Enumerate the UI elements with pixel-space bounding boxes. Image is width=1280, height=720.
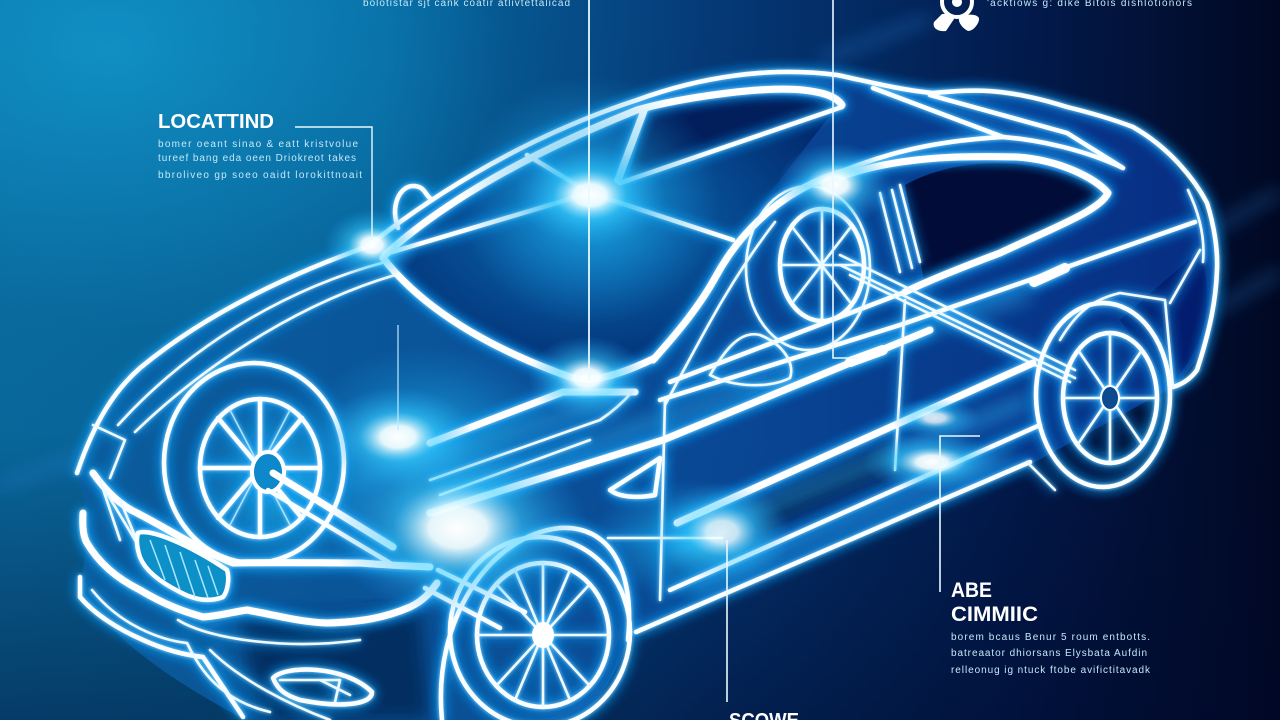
A pillar <box>653 170 850 360</box>
text block: LOCATIND <box>158 111 362 181</box>
bumper shadow <box>240 610 430 720</box>
rear body <box>1060 190 1203 387</box>
fog lamp <box>273 670 372 704</box>
callout line: bottom <box>726 540 728 702</box>
window pillars <box>880 185 920 272</box>
wheel: bottom front <box>441 528 630 720</box>
front fascia band <box>93 473 430 567</box>
lower shadow door <box>740 440 900 530</box>
description: ABE CIMINIC: batreaator dhiorsans Elysbata Aufdin <box>951 648 1147 659</box>
windshield frame top <box>385 89 842 255</box>
windshield braces <box>527 155 733 240</box>
icon: person badge <box>934 0 979 31</box>
hood crease <box>430 392 635 443</box>
heading: ABE CIMINIC: CIMMIIC <box>951 603 1038 626</box>
wheel: rear near <box>1036 303 1170 487</box>
side window dark <box>905 163 1105 285</box>
drive shaft <box>273 473 393 547</box>
description: ABE CIMINIC <box>951 632 1151 676</box>
text block: ABE CIMINIC <box>951 579 1151 676</box>
description: ABE CIMINIC: borem bcaus Benur 5 roum entbotts. <box>951 632 1150 643</box>
body streak lines <box>430 330 930 513</box>
outline: roof and rear <box>372 72 1217 387</box>
description: LOCATIND: bbroliveo gp soeo oaidt lorokittnoait <box>158 170 362 181</box>
body light streaks <box>350 290 1030 590</box>
mirror near <box>710 334 791 385</box>
callout line: top centre <box>588 0 590 380</box>
wheel: front near <box>164 363 344 563</box>
wheel: rear far <box>746 186 870 350</box>
front wheel glow <box>180 385 390 585</box>
heading: ABE CIMINIC: ABE <box>951 579 992 602</box>
callout line: ABE <box>940 436 980 592</box>
mirror far <box>395 186 430 228</box>
callout line: locating <box>295 127 372 240</box>
heading: LOCATIND: LOCATTIND <box>158 111 274 133</box>
fender vent <box>610 458 660 497</box>
callout line: top right <box>833 0 858 358</box>
description: LOCATIND: bomer oeant sinao & eatt kristvolue <box>158 139 358 150</box>
description: LOCATIND: tureef bang eda oeen Driokreot takes <box>158 153 356 164</box>
grille <box>137 532 228 600</box>
callout line: hood <box>397 325 399 430</box>
windshield glass <box>385 94 840 380</box>
car body silhouette <box>77 73 1217 720</box>
heading: ABE CIMINIC <box>951 579 1038 626</box>
glow hotspots <box>320 75 1002 618</box>
roof panel dark <box>628 95 835 178</box>
side window frame <box>840 157 1108 292</box>
description: ABE CIMINIC: relleonug ig ntuck ftobe avifictitavadk <box>951 665 1151 676</box>
front arch line <box>608 537 722 539</box>
door handles <box>850 350 883 362</box>
roof panel seams <box>845 88 1003 170</box>
lower door glow <box>590 480 790 600</box>
description: LOCATIND <box>158 139 362 181</box>
beltline <box>660 222 1195 400</box>
outline: hood and front <box>77 245 372 473</box>
windshield frame bottom <box>383 258 655 379</box>
rear quarter dark <box>1120 250 1207 385</box>
hood glow <box>300 345 560 535</box>
door seams <box>660 300 905 600</box>
lamp cluster <box>100 480 145 560</box>
lower bumper <box>80 577 243 717</box>
